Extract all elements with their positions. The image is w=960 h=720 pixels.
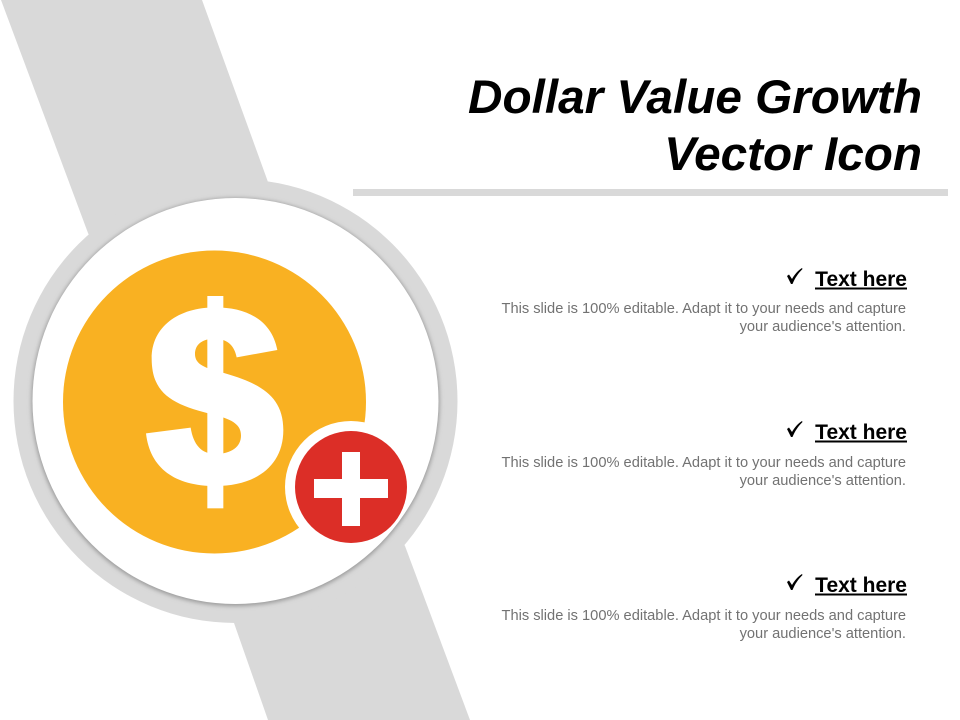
- icon: check mark: [787, 268, 802, 284]
- upper gray band: [1, 0, 270, 300]
- item heading: Text here: [815, 268, 907, 291]
- item 2: [502, 421, 907, 489]
- red disc: [295, 431, 407, 543]
- title: Vector Icon: [664, 128, 922, 181]
- item description: This slide is 100% editable. Adapt it to your needs and capture: [502, 608, 906, 624]
- item description: [502, 455, 906, 489]
- title rule: [353, 189, 948, 196]
- item heading: Text here: [815, 574, 907, 597]
- inner white circle: [32, 198, 438, 604]
- inner circle shadow: [32, 198, 440, 606]
- title: [468, 71, 922, 181]
- item heading: Text here: [815, 421, 907, 444]
- item description: your audience's attention.: [740, 626, 906, 642]
- white plus: [314, 452, 388, 526]
- gold coin: [63, 250, 366, 554]
- item description: your audience's attention.: [740, 319, 906, 335]
- lower gray band: [234, 500, 470, 720]
- item 3: [502, 574, 907, 642]
- icon: gold coin with dollar sign: [63, 250, 366, 554]
- item description: This slide is 100% editable. Adapt it to your needs and capture: [502, 301, 906, 317]
- icon: check mark: [787, 574, 802, 590]
- title: Dollar Value Growth: [468, 71, 922, 124]
- dollar sign: [146, 296, 283, 508]
- white badge border: [285, 421, 417, 553]
- item description: This slide is 100% editable. Adapt it to your needs and capture: [502, 455, 906, 471]
- item description: your audience's attention.: [740, 473, 906, 489]
- icon: red plus badge: [285, 421, 417, 553]
- item description: [502, 301, 906, 335]
- item 1: [502, 268, 907, 335]
- icon: check mark: [787, 421, 802, 437]
- item description: [502, 608, 906, 642]
- outer gray ring: [14, 179, 458, 623]
- watch-like badge graphic: [1, 0, 470, 720]
